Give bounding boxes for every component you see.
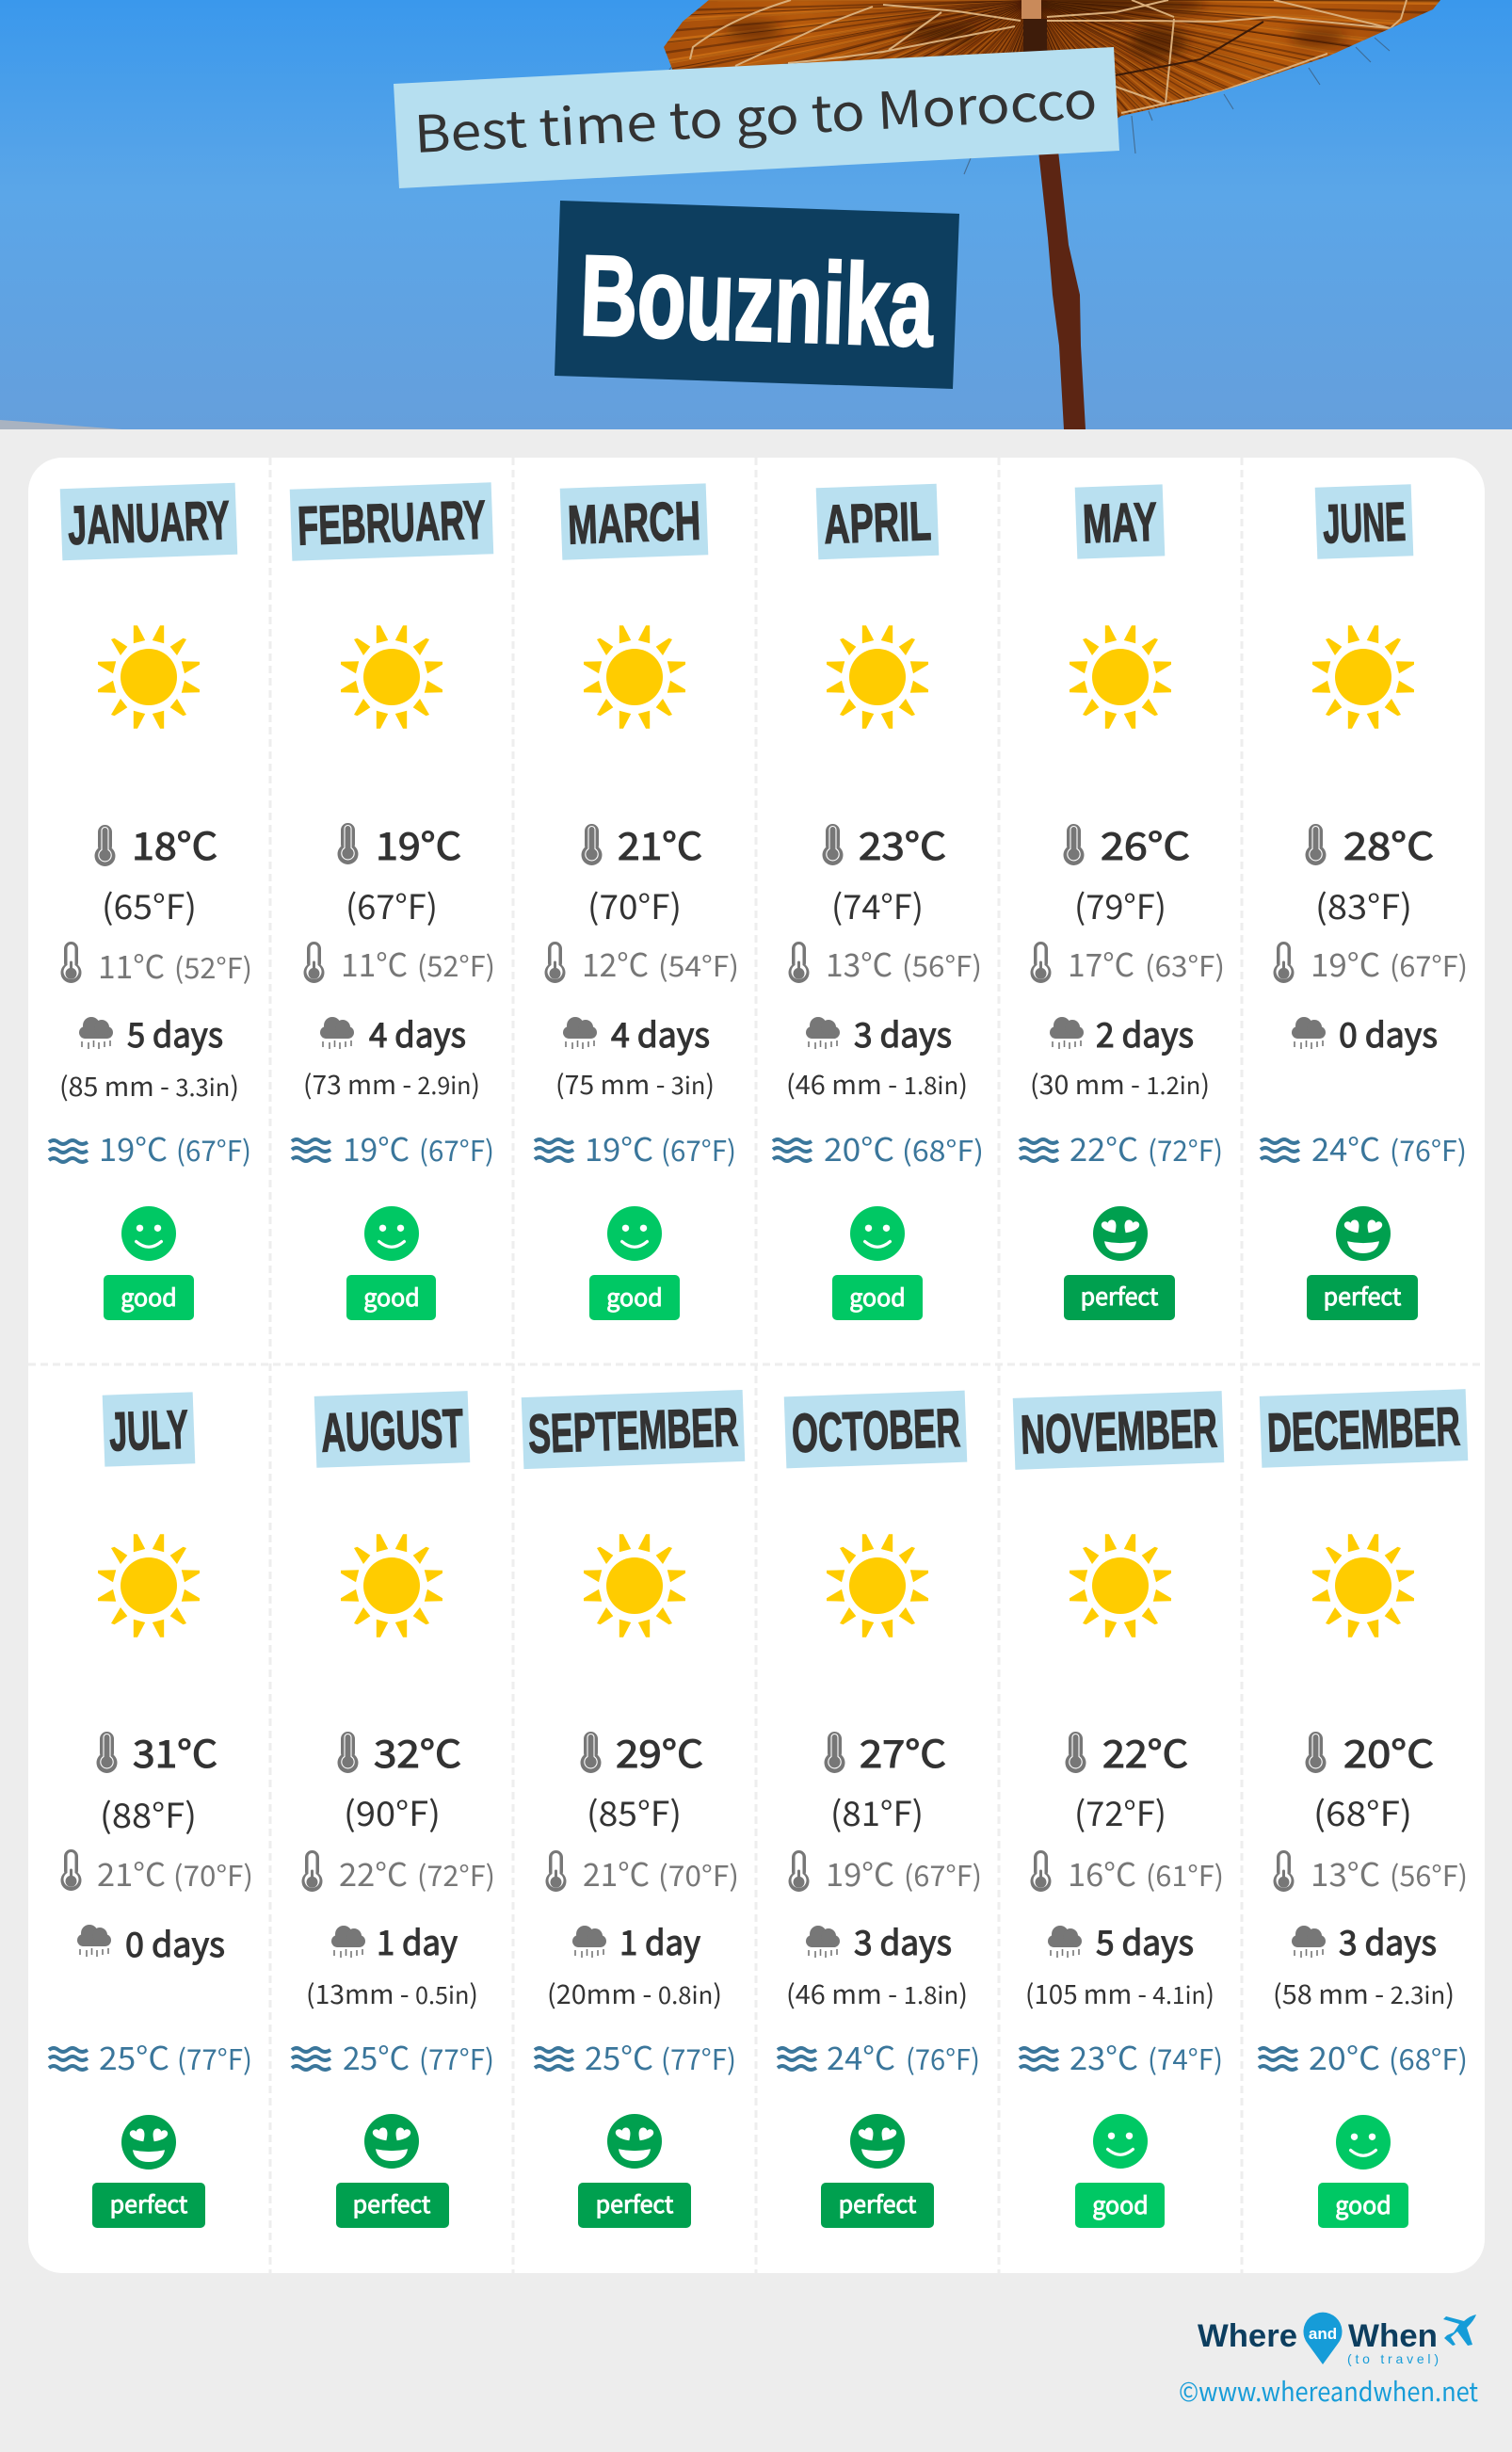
month heading: MAY [1082,492,1158,555]
panel: December [1259,1389,1468,2228]
high temperature: 23°C [859,816,946,871]
rating badge [1075,2183,1165,2228]
icon: thermometer high [582,824,603,865]
rain days: 0 days [1339,1008,1438,1057]
low temperature: 11°C [341,940,408,986]
sea Fahrenheit: (72°F) [1148,1128,1223,1170]
icon: thermometer low [1273,1850,1294,1892]
month heading: JULY [108,1399,189,1462]
icon: waves [292,1139,330,1161]
high Fahrenheit: (74°F) [831,880,924,929]
sea Fahrenheit: (77°F) [661,2037,736,2078]
month heading [103,1392,195,1467]
icon: rain cloud [1050,1017,1084,1049]
rating badge: perfect [1324,1279,1402,1313]
logo: Where and When: When [1348,2318,1438,2354]
icon: thermometer low [303,942,324,983]
icon: good smiley [607,1206,662,1261]
high temperature: 31°C [133,1724,217,1779]
month heading: FEBRUARY [297,490,487,557]
logo: Where and When [1198,2313,1476,2366]
rainfall: (85 mm - 3.3in) [59,1067,239,1105]
icon: perfect smiley [364,2114,419,2169]
hero: beach sky photo with parasol [0,0,1512,429]
rating badge: good [363,1280,420,1314]
month heading [1013,1391,1224,1470]
icon: thermometer low [789,1850,810,1892]
icon: perfect smiley [607,2114,662,2169]
low temperature: 13°C [826,940,893,986]
sea temperature: 24°C [1311,1124,1380,1170]
high temperature: 28°C [1343,816,1434,871]
sea Fahrenheit: (74°F) [1148,2037,1223,2078]
sea temperature: 24°C [827,2033,895,2079]
icon: sun [98,1534,200,1637]
panel: May [1020,484,1225,1320]
rain days: 3 days [1339,1916,1437,1965]
low temperature: 17°C [1068,940,1134,986]
high temperature: 26°C [1101,816,1190,871]
high Fahrenheit: (79°F) [1074,880,1166,929]
rainfall: (58 mm - 2.3in) [1273,1975,1455,2012]
rainfall: (20mm - 0.8in) [547,1975,722,2012]
high Fahrenheit: (65°F) [102,880,197,929]
month heading: NOVEMBER [1020,1397,1218,1466]
month heading [784,1391,967,1468]
month heading: APRIL [823,491,932,556]
subtitle ribbon: Best time to go to Morocco [412,58,1099,168]
panel: January [49,483,252,1320]
sea Fahrenheit: (67°F) [661,1128,736,1170]
sea temperature: 22°C [1070,1124,1138,1170]
high Fahrenheit: (68°F) [1313,1787,1412,1836]
rating badge: perfect [353,2186,431,2220]
month heading: AUGUST [320,1397,464,1464]
rain days: 5 days [1096,1916,1194,1965]
rating badge [589,1275,680,1320]
icon: sun [584,625,685,729]
icon: thermometer low [1030,942,1051,983]
logo: Where and When: Where [1198,2318,1297,2354]
rain days: 0 days [125,1918,225,1967]
icon: waves [778,2048,816,2070]
sea Fahrenheit: (76°F) [1390,1128,1467,1170]
panel: April [773,484,984,1320]
month heading [290,482,493,561]
low temperature: 21°C [97,1849,166,1895]
rating badge: good [1335,2187,1391,2221]
icon: waves [1020,1139,1058,1161]
low Fahrenheit: (52°F) [174,945,252,987]
icon: rain cloud [79,1017,113,1049]
icon: rain cloud [1048,1926,1082,1958]
logo: Where and When: (to travel) [1347,2351,1439,2366]
rain days: 4 days [611,1008,710,1057]
icon: thermometer low [1030,1850,1051,1892]
icon: perfect smiley [850,2114,905,2169]
icon: sun [1070,625,1171,729]
icon: thermometer high [337,1732,358,1773]
high Fahrenheit: (90°F) [344,1787,441,1836]
rainfall: (46 mm - 1.8in) [786,1065,968,1103]
sea Fahrenheit: (67°F) [176,1128,251,1170]
month heading: SEPTEMBER [527,1396,739,1465]
high Fahrenheit: (81°F) [830,1787,924,1836]
icon: rain cloud [1292,1017,1326,1049]
icon: thermometer low [60,942,81,983]
icon: thermometer high [1066,1732,1086,1773]
icon: perfect smiley [1336,1206,1391,1261]
rating badge: good [606,1280,663,1314]
icon: waves [535,2048,573,2070]
rating badge: perfect [596,2186,674,2220]
icon: perfect smiley [1093,1206,1148,1261]
low Fahrenheit: (56°F) [902,944,982,985]
low temperature: 22°C [339,1849,408,1895]
high Fahrenheit: (85°F) [587,1787,682,1836]
high temperature: 20°C [1343,1724,1434,1779]
icon: waves [1020,2048,1058,2070]
sea temperature: 25°C [343,2033,410,2079]
sea Fahrenheit: (76°F) [906,2037,980,2078]
low Fahrenheit: (61°F) [1146,1853,1224,1895]
sea temperature: 20°C [1309,2033,1380,2079]
rating badge [1307,1275,1418,1320]
low temperature: 13°C [1311,1849,1380,1895]
icon: sun [827,1534,928,1637]
icon: waves [49,1140,88,1162]
icon: good smiley [1336,2115,1391,2170]
month heading [522,1390,745,1469]
icon: rain cloud [320,1017,354,1049]
panel: February [290,482,495,1320]
sea temperature: 19°C [99,1124,168,1170]
month heading [60,483,237,560]
rain days: 5 days [127,1008,223,1057]
icon: good smiley [1093,2114,1148,2169]
low Fahrenheit: (52°F) [417,944,495,985]
icon: thermometer high [1305,824,1326,865]
icon: sun [827,625,928,729]
rain days: 1 day [619,1916,700,1965]
low temperature: 11°C [98,942,165,988]
low Fahrenheit: (67°F) [1390,944,1468,985]
rating badge [346,1275,436,1320]
month heading [560,483,708,560]
icon: waves [1261,1139,1299,1161]
panel: September [522,1390,745,2228]
icon: sun [584,1534,685,1637]
rating badge [821,2183,934,2228]
sea temperature: 19°C [343,1124,410,1170]
icon: perfect smiley [121,2115,176,2170]
icon: waves [1259,2048,1297,2070]
icon: waves [535,1139,573,1161]
month heading: JANUARY [67,490,231,557]
icon: waves [773,1139,812,1161]
icon: rain cloud [331,1926,365,1958]
icon: thermometer low [60,1849,81,1891]
high Fahrenheit: (83°F) [1315,880,1412,929]
rain days: 3 days [854,1916,952,1965]
icon: waves [292,2048,330,2070]
rating badge: good [121,1280,177,1314]
low temperature: 21°C [583,1849,650,1895]
icon: thermometer high [94,825,115,866]
month heading: MARCH [567,491,701,556]
rain days: 3 days [854,1008,952,1057]
sea temperature: 23°C [1070,2033,1138,2079]
sea temperature: 25°C [99,2033,169,2079]
rating badge: good [849,1280,906,1314]
subtitle ribbon [394,47,1119,188]
sea temperature: 20°C [824,1124,894,1170]
icon: sun [341,1534,442,1637]
icon: plane [1443,2315,1476,2346]
high temperature: 27°C [860,1724,946,1779]
icon: thermometer high [1305,1732,1326,1773]
icon: thermometer low [789,942,810,983]
icon: thermometer high [823,824,844,865]
icon: thermometer low [301,1850,322,1892]
low Fahrenheit: (54°F) [658,944,739,985]
icon: rain cloud [572,1926,606,1958]
rating badge [92,2183,205,2228]
rainfall: (73 mm - 2.9in) [303,1065,480,1103]
rating badge [1064,1275,1175,1320]
month heading [1075,484,1165,559]
rain days: 2 days [1096,1008,1194,1057]
high temperature: 29°C [616,1724,703,1779]
low Fahrenheit: (72°F) [417,1853,495,1895]
icon: thermometer low [544,942,565,983]
panel: July [49,1392,253,2228]
icon: map pin [1303,2313,1343,2364]
panel: March [535,483,739,1320]
sea temperature: 19°C [585,1124,653,1170]
icon: sun [341,625,442,729]
low temperature: 19°C [826,1849,894,1895]
panel: November [1013,1391,1224,2228]
rating badge: perfect [1081,1279,1159,1313]
rating badge: good [1092,2187,1149,2221]
high temperature: 18°C [132,816,217,871]
high temperature: 22°C [1102,1724,1188,1779]
icon: thermometer high [580,1732,601,1773]
low Fahrenheit: (56°F) [1390,1853,1468,1895]
icon: sun [1312,1534,1414,1637]
icon: thermometer high [96,1732,117,1773]
low temperature: 12°C [582,940,649,986]
icon: thermometer high [337,823,358,864]
high temperature: 32°C [374,1724,461,1779]
high Fahrenheit: (72°F) [1074,1787,1166,1836]
rainfall: (105 mm - 4.1in) [1025,1975,1214,2012]
rating badge [104,1275,194,1320]
low Fahrenheit: (67°F) [904,1853,982,1895]
panel: monthly weather card [28,458,1485,2273]
icon: thermometer low [1273,942,1294,983]
icon: rain cloud [806,1926,840,1958]
title: Bouznika: Bouznika [578,231,937,370]
sea Fahrenheit: (68°F) [902,1128,984,1170]
panel: August [292,1391,495,2228]
rainfall: (13mm - 0.5in) [306,1975,478,2012]
sea Fahrenheit: (77°F) [419,2037,494,2078]
icon: rain cloud [806,1017,840,1049]
low Fahrenheit: (63°F) [1145,944,1225,985]
low Fahrenheit: (70°F) [173,1853,253,1895]
rain days: 4 days [369,1008,466,1057]
rating badge [1318,2183,1408,2228]
icon: good smiley [850,1206,905,1261]
icon: good smiley [121,1206,176,1261]
icon: rain cloud [563,1017,597,1049]
icon: rain cloud [1292,1926,1326,1958]
icon: thermometer high [1064,824,1085,865]
rainfall: (75 mm - 3in) [555,1065,715,1103]
icon: sun [1312,625,1414,729]
icon: thermometer low [546,1850,567,1892]
sea temperature: 25°C [585,2033,653,2079]
high Fahrenheit: (70°F) [587,880,682,929]
rating badge [832,1275,923,1320]
icon: rain cloud [77,1925,111,1957]
icon: waves [49,2048,88,2070]
high temperature: 19°C [376,816,461,871]
sea Fahrenheit: (67°F) [419,1128,494,1170]
rating badge [336,2183,449,2228]
month heading [314,1391,470,1468]
sea Fahrenheit: (68°F) [1389,2037,1468,2078]
month heading: JUNE [1322,491,1407,556]
title: Bouznika [555,201,959,389]
month heading [816,484,939,559]
sea Fahrenheit: (77°F) [177,2037,252,2078]
low temperature: 16°C [1068,1849,1136,1895]
high Fahrenheit: (88°F) [100,1789,197,1838]
month heading [1315,484,1413,559]
rating badge [578,2183,691,2228]
icon: sun [1070,1534,1171,1637]
low Fahrenheit: (70°F) [658,1853,739,1895]
rainfall: (30 mm - 1.2in) [1030,1065,1210,1103]
rating badge: perfect [110,2186,188,2220]
panel: June [1261,484,1468,1320]
low temperature: 19°C [1311,940,1380,986]
high temperature: 21°C [618,816,702,871]
icon: good smiley [364,1206,419,1261]
icon: thermometer high [825,1732,845,1773]
panel: October [778,1391,982,2228]
high Fahrenheit: (67°F) [346,880,438,929]
month heading: OCTOBER [791,1397,961,1464]
website credit: ©www.whereandwhen.net [1179,2372,1478,2410]
rating badge: perfect [839,2186,917,2220]
rain days: 1 day [377,1916,458,1965]
rainfall: (46 mm - 1.8in) [786,1975,968,2012]
icon: sun [98,625,200,729]
icon: map pin: and [1309,2325,1337,2343]
